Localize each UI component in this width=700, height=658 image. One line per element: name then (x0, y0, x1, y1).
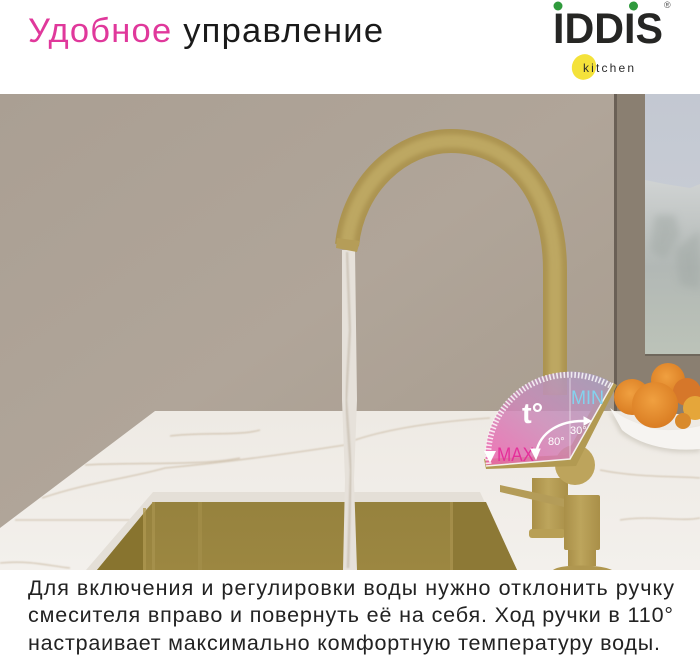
marker triangle (484, 451, 496, 463)
outline (486, 383, 613, 466)
sink (86, 492, 517, 570)
logo: IDDIS kitchen: ® (664, 0, 671, 10)
caption text: настраивает максимально комфортную температуру воды. (28, 631, 660, 655)
label: MAX: MAX (497, 445, 534, 466)
water stream (342, 250, 357, 570)
aerator (336, 238, 360, 252)
caption text (28, 576, 674, 655)
photo: kitchen scene (0, 94, 700, 570)
arrow: rotation arc (531, 417, 591, 459)
gradient sector (486, 372, 613, 465)
soap dispenser lever (500, 485, 565, 507)
caption text: Для включения и регулировки воды нужно отклонить ручку (28, 576, 674, 600)
wall (0, 94, 615, 534)
label: 30 degrees: 30° (570, 425, 587, 437)
vertical guide (569, 378, 571, 459)
bowl and oranges (608, 363, 700, 453)
logo: IDDIS kitchen (553, 0, 671, 84)
logo: IDDIS kitchen: IDDIS (553, 5, 663, 53)
marble veins (0, 418, 700, 568)
lower body (532, 478, 568, 533)
handle disc (555, 445, 595, 485)
temperature dial overlay (484, 372, 617, 469)
handle bars (484, 380, 617, 469)
white caption band (0, 570, 700, 658)
label: t degrees: t° (522, 398, 543, 430)
label: 80 degrees: 80° (548, 436, 565, 448)
faucet (336, 141, 612, 570)
marble countertop (0, 411, 700, 570)
title: Удобное управление (28, 12, 383, 50)
soap dispenser (564, 495, 600, 550)
base ring (529, 529, 565, 538)
tick ring (488, 375, 611, 464)
logo: IDDIS kitchen: kitchen (583, 61, 634, 75)
caption text: смесителя вправо и повернуть её на себя. Ход ручки в 110° (28, 603, 673, 627)
label: MIN: MIN (571, 388, 604, 409)
spout (347, 141, 555, 395)
window frame (614, 94, 700, 414)
